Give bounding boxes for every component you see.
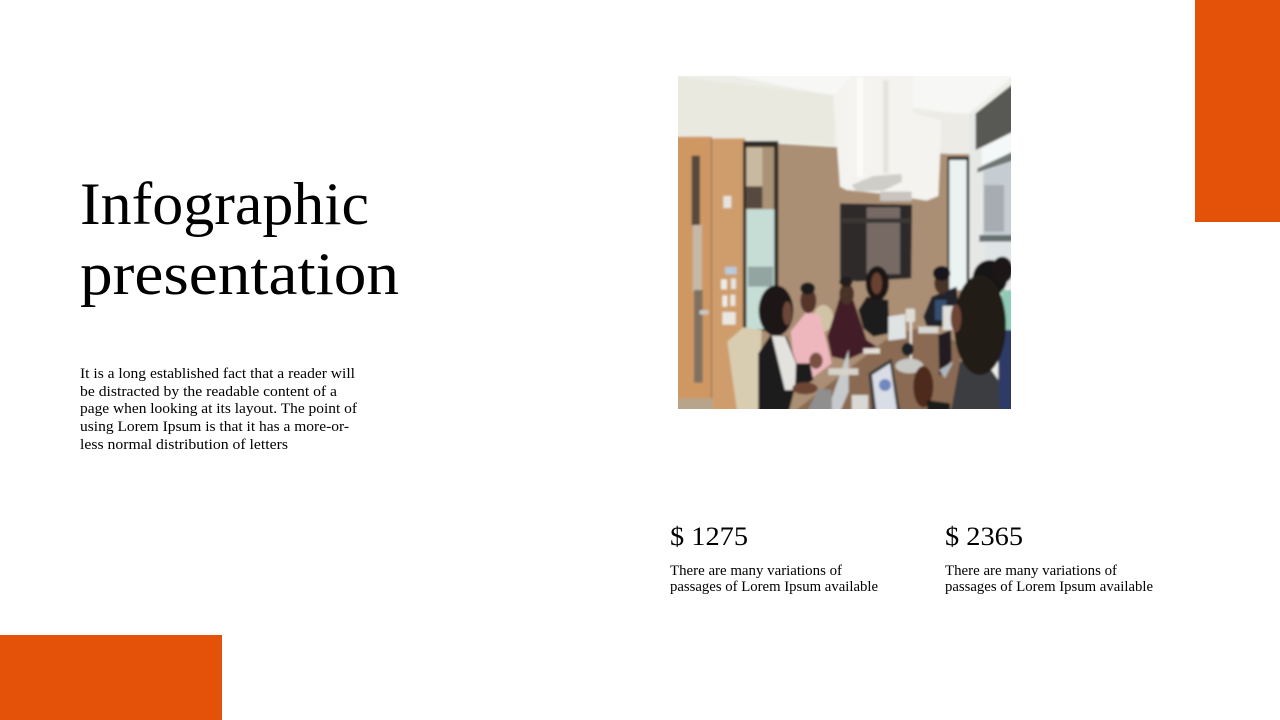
stat: 1275 — [670, 522, 878, 595]
title: Infographic — [80, 171, 369, 237]
hanging fabric lamp — [834, 98, 942, 202]
body text block: It is a long established fact that a reader will — [80, 366, 355, 382]
description: passages of Lorem Ipsum available — [945, 579, 1153, 595]
right window and blinds — [947, 157, 969, 290]
description — [670, 563, 878, 595]
interior glass window — [743, 141, 778, 331]
wood wall — [760, 142, 970, 409]
amount: $ 2365 — [945, 522, 1023, 551]
amount: $ 1275 — [670, 522, 748, 551]
door and panel — [678, 135, 713, 409]
decorative block: bottom left orange — [0, 635, 222, 720]
description — [945, 563, 1153, 595]
table — [796, 328, 962, 409]
body text block: using Lorem Ipsum is that it has a more-or- — [80, 419, 349, 435]
description: passages of Lorem Ipsum available — [670, 579, 878, 595]
ceiling and upper wall — [678, 76, 1011, 380]
door fixtures — [723, 196, 731, 208]
title: presentation — [80, 241, 399, 307]
person 5 right side — [923, 287, 958, 327]
background people right — [973, 260, 1007, 297]
table lamp — [906, 309, 915, 322]
person 4 dark hair — [858, 297, 889, 337]
body text block: page when looking at its layout. The point of — [80, 401, 357, 417]
foreground woman with curly hair — [950, 360, 1000, 409]
person 1 foreground left — [758, 333, 813, 420]
laptops and papers — [832, 349, 849, 420]
body text block: less normal distribution of letters — [80, 437, 288, 453]
person 2 pink blouse — [791, 312, 832, 378]
dark floor below chairs — [745, 400, 789, 420]
decorative block: top right orange — [1195, 0, 1280, 222]
person 3 maroon — [827, 297, 877, 360]
description: There are many variations of — [945, 563, 1117, 579]
body text block — [80, 366, 357, 453]
wall screen — [840, 203, 912, 282]
description: There are many variations of — [670, 563, 842, 579]
body text block: be distracted by the readable content of a — [80, 384, 338, 400]
stat: 2365 — [945, 522, 1153, 595]
chairs — [727, 327, 762, 420]
title — [80, 171, 399, 307]
photo: team meeting in a conference room — [678, 76, 1011, 409]
